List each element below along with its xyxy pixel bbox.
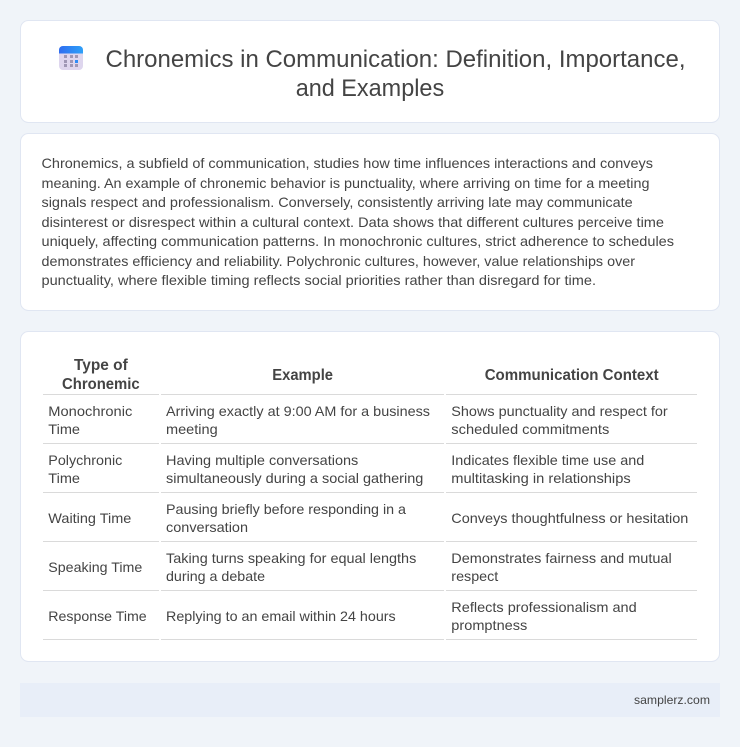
- text block: paragraph: [42, 155, 674, 288]
- table row: polychronic time: simultaneously during a social gathering: [166, 470, 423, 486]
- text block: paragraph: demonstrates efficiency and reliability. Polychronic cultures, however, value relationships over: [42, 253, 635, 269]
- title: Chronemics in Communication: Definition, Importance,: [106, 46, 686, 73]
- table row: speaking time: [48, 550, 672, 584]
- table row: polychronic time: [48, 452, 644, 486]
- table row: polychronic time: Time: [48, 470, 80, 486]
- title: [106, 46, 686, 102]
- table row: response time: Reflects professionalism and: [451, 599, 637, 615]
- table row: waiting time: conversation: [166, 519, 248, 535]
- text block: paragraph: signals respect and professionalism. Conversely, consistently arriving late may communicate: [42, 194, 633, 210]
- table row: waiting time: [48, 501, 688, 535]
- table row: monochronic time: [48, 403, 668, 437]
- table row: polychronic time: Polychronic: [48, 452, 122, 468]
- table row: speaking time: during a debate: [166, 568, 265, 584]
- text block: paragraph: disinterest or disrespect within a cultural context. Data shows that different cultures perceive time: [42, 214, 664, 230]
- table row: waiting time: Conveys thoughtfulness or hesitation: [451, 510, 688, 526]
- icon: calendar: [59, 46, 83, 70]
- table header row: Communication Context: [485, 367, 659, 384]
- text block: paragraph: Chronemics, a subfield of communication, studies how time influences interactions and conveys: [42, 155, 653, 171]
- panel: introduction paragraph: [20, 134, 720, 310]
- panel: chronemics table: [20, 332, 720, 662]
- table header row: Type of: [74, 357, 128, 374]
- table header row: Chronemic: [62, 376, 140, 393]
- table row: monochronic time: Shows punctuality and respect for: [451, 403, 668, 419]
- table header row: [62, 357, 659, 393]
- table row: waiting time: Waiting Time: [48, 510, 132, 526]
- table row: speaking time: Speaking Time: [48, 559, 143, 575]
- panel: title header: [20, 20, 720, 122]
- table row: monochronic time: Time: [48, 421, 80, 437]
- table row: polychronic time: Having multiple conversations: [166, 452, 358, 468]
- table row: monochronic time: Arriving exactly at 9:00 AM for a business: [166, 403, 430, 419]
- text block: paragraph: uniquely, affecting communication patterns. In monochronic cultures, strict adherence to schedules: [42, 233, 674, 249]
- table row: response time: Response Time: [48, 608, 147, 624]
- footer source text: samplerz.com: [634, 693, 710, 707]
- table row: speaking time: Demonstrates fairness and mutual: [451, 550, 672, 566]
- table row: polychronic time: Indicates flexible time use and: [451, 452, 644, 468]
- table row: monochronic time: scheduled commitments: [451, 421, 609, 437]
- table row: speaking time: respect: [451, 568, 498, 584]
- table row: response time: [48, 599, 637, 633]
- table header row: Example: [272, 367, 333, 384]
- text block: paragraph: punctuality, where flexible timing reflects social priorities rather than disregard for time.: [42, 272, 596, 288]
- table row: speaking time: Taking turns speaking for equal lengths: [166, 550, 416, 566]
- footer bar: [20, 683, 720, 717]
- table row: response time: promptness: [451, 617, 527, 633]
- table row: monochronic time: Monochronic: [48, 403, 132, 419]
- text block: paragraph: meaning. An example of chronemic behavior is punctuality, where arriving on time for a meeting: [42, 175, 650, 191]
- table row: polychronic time: multitasking in relationships: [451, 470, 631, 486]
- table row: waiting time: Pausing briefly before responding in a: [166, 501, 406, 517]
- title: and Examples: [296, 75, 444, 102]
- table row: response time: Replying to an email within 24 hours: [166, 608, 396, 624]
- table row: monochronic time: meeting: [166, 421, 218, 437]
